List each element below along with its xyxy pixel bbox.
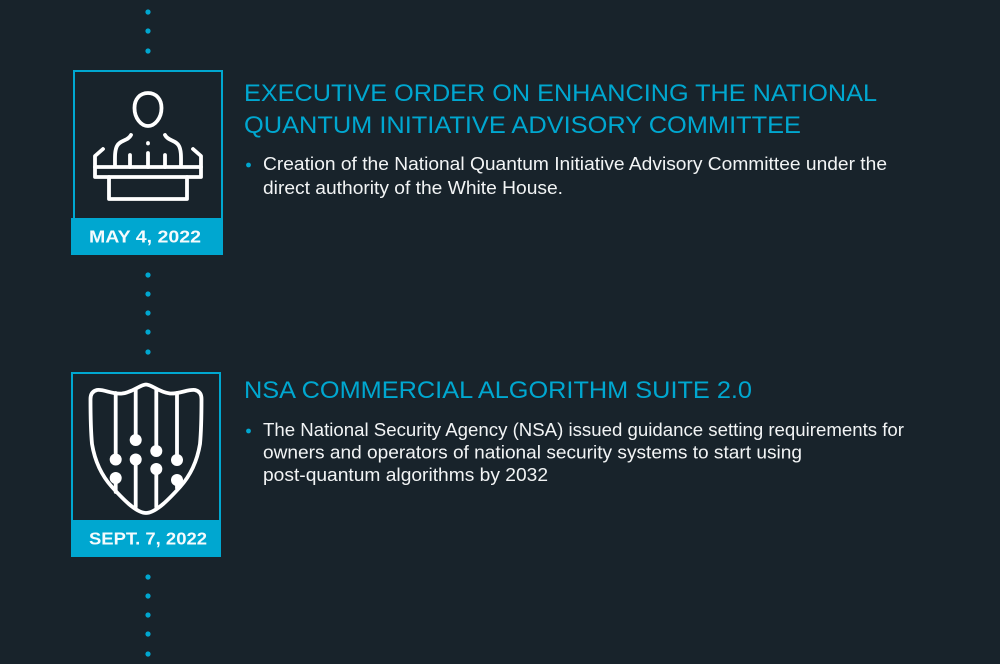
date band xyxy=(71,520,221,557)
bullet text xyxy=(246,420,904,485)
timeline dots: bottom xyxy=(145,574,151,657)
bullet text: direct authority of the White House. xyxy=(263,178,563,198)
panel: NSA text xyxy=(244,377,904,485)
panel: May 4 2022 date card xyxy=(71,71,223,255)
heading: NSA COMMERCIAL ALGORITHM SUITE 2.0 xyxy=(244,377,752,404)
bullet text: Creation of the National Quantum Initiative Advisory Committee under the xyxy=(263,154,887,174)
bullet text xyxy=(246,154,887,198)
heading: EXECUTIVE ORDER ON ENHANCING THE NATIONAL xyxy=(244,80,877,107)
bullet text: The National Security Agency (NSA) issued guidance setting requirements for xyxy=(263,420,904,440)
bullet text: post-quantum algorithms by 2032 xyxy=(263,465,548,485)
date band xyxy=(71,218,223,255)
date label: SEPT. 7, 2022 xyxy=(89,528,207,548)
timeline dots: middle xyxy=(145,272,151,355)
timeline dots: top xyxy=(145,9,151,54)
bullet text: owners and operators of national security systems to start using xyxy=(263,442,802,462)
date label: MAY 4, 2022 xyxy=(89,226,201,246)
icon: circuit shield xyxy=(90,384,202,513)
heading xyxy=(244,80,877,139)
panel: Sept 7 2022 date card xyxy=(71,373,221,557)
panel: executive order text xyxy=(244,80,887,198)
icon: speaker at podium xyxy=(95,93,201,199)
heading: QUANTUM INITIATIVE ADVISORY COMMITTEE xyxy=(244,112,801,139)
